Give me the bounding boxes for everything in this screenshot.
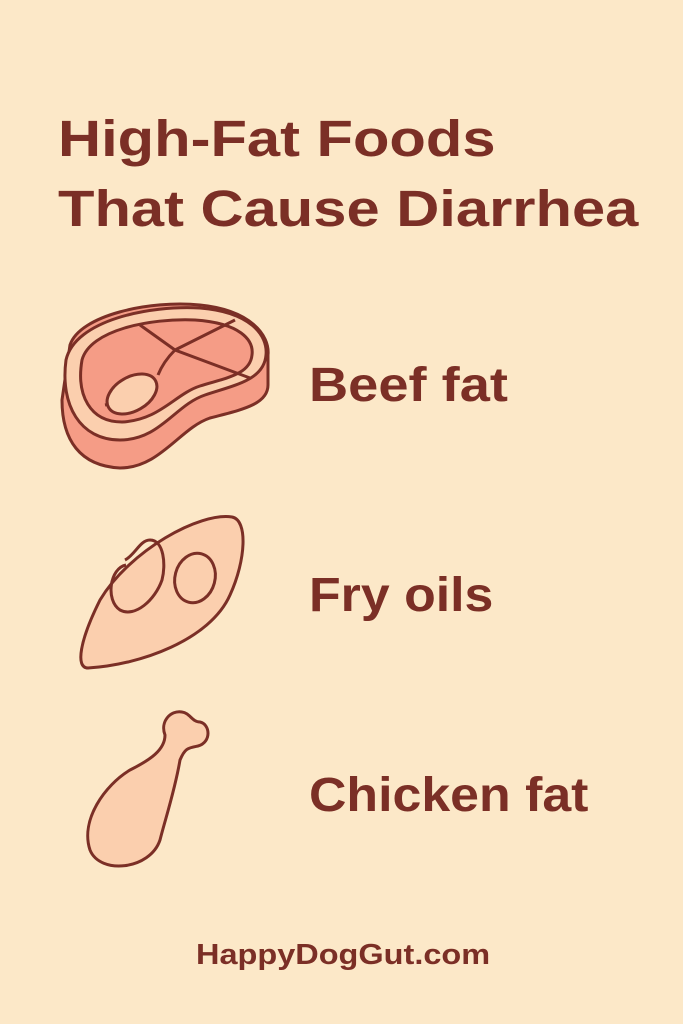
label: fry oils: Fry oils bbox=[309, 569, 493, 622]
label: beef fat: Beef fat bbox=[309, 359, 508, 412]
title: That Cause Diarrhea bbox=[58, 180, 638, 237]
icon: chicken drumstick bbox=[86, 710, 210, 868]
icon: fry oil bbox=[79, 515, 245, 670]
label: chicken fat: Chicken fat bbox=[309, 769, 588, 822]
title bbox=[58, 110, 639, 237]
footer: HappyDogGut.com bbox=[196, 939, 490, 971]
icon: steak bbox=[60, 302, 270, 470]
title: High-Fat Foods bbox=[58, 110, 496, 167]
